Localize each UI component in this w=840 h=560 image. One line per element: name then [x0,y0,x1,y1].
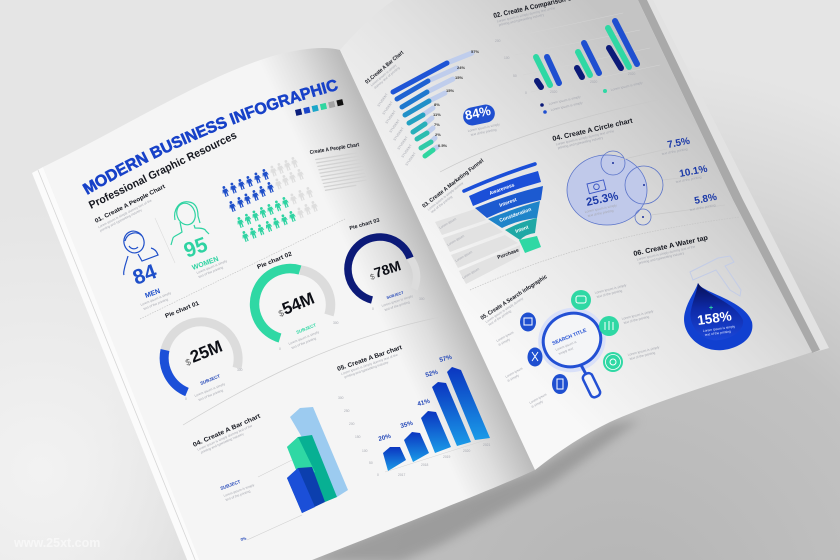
marketing funnel: Awareness [489,182,516,197]
stat: women [181,233,228,279]
marketing funnel: Lorem ipsum [454,250,473,263]
04 bar chart heading: 04. Create A Bar chart [192,412,262,449]
pie chart 03 [348,218,425,312]
search heading: Lorem ipsum is simply dummy [485,296,524,324]
05 column chart: 0 [377,473,379,477]
search icons: text of the printing [623,315,650,325]
05 column chart: 200 [349,422,355,426]
stat: men [130,260,172,311]
magnifier [529,298,615,399]
05 column chart: 250 [344,409,350,413]
horizontal bar chart: 8% [434,102,440,107]
05 column chart: 2018 [421,463,429,467]
search heading: 05. Create A Search infographic [480,274,549,322]
pie chart 01: 0 [185,397,187,401]
marketing funnel: Intent [515,224,530,235]
04 circle chart heading: 04. Create A Circle chart [552,118,634,143]
horizontal bar chart: STUDENT [401,144,413,159]
funnel heading: 03. Create A Marketing Funnel [422,158,485,210]
people pictogram chart [220,156,319,243]
05 column chart: 150 [355,435,361,439]
comparison bar chart: 100 [504,56,510,60]
pie chart 02: SUBJECT [296,322,317,335]
people chart text block [309,142,368,191]
people chart heading [94,184,170,233]
horizontal bar chart: 15% [446,88,454,93]
comparison bar chart: 2020 [550,90,558,94]
comparison legend: Lorem ipsum is simply [548,95,581,106]
comparison legend [540,81,643,114]
pie chart 02: $ [277,308,285,319]
horizontal bar chart: STUDENT [397,136,409,151]
water drop: + [709,305,713,312]
pie chart 03: 78M [372,257,403,281]
horizontal bar chart: STUDENT [382,101,394,116]
04 circle chart heading: printing and typesetting industry [557,136,604,150]
05 column chart: 2017 [398,473,406,477]
pie chart 02: Lorem ipsum is simply [288,330,320,346]
horizontal bar chart: STUDENT [377,93,389,108]
pie chart 03: text of the printing [384,300,410,312]
comparison legend: Lorem ipsum is simply [610,81,643,92]
horizontal bar chart: 57% [471,49,479,54]
05 bar chart heading: Lorem ipsum is simply dummy text of the [341,353,398,376]
marketing funnel: Interest [499,197,518,209]
people chart text block: Create A People Chart [309,142,360,156]
pie chart 01 [164,301,243,402]
comparison bar chart: 2020 [590,80,598,84]
pie chart 03: SUBJECT [386,290,405,300]
pie chart 02: 54M [279,289,317,319]
02 comparison heading [493,0,586,28]
callout 84%: text of the printing [470,128,497,137]
horizontal bar chart: 11% [433,112,441,117]
search icons: is simply [531,399,544,409]
search icons: is simply [498,337,511,347]
people chart heading: 01. Create A People Chart [94,184,166,225]
stat: men: MEN [144,288,161,300]
marketing funnel [435,164,543,284]
05 column chart: 2019 [443,455,451,459]
05 column chart: 41% [417,398,431,408]
funnel heading: Lorem ipsum is simply dummy [427,181,464,211]
people chart heading: Lorem ipsum is simply dummy text of the [97,198,153,229]
05 column chart: 100 [362,449,368,453]
horizontal bar chart: STUDENT [405,152,417,167]
01 bar chart heading: 01.Create A Bar Chart [364,50,405,86]
comparison bar chart: 0 [525,91,527,95]
stat: men: Lorem ipsum is simply [140,291,172,307]
horizontal bar chart: 24% [457,65,465,70]
comparison bar chart: 50 [513,74,517,78]
01 bar chart heading: Lorem ipsum is simply [370,63,398,87]
circle chart: text of the printing [689,203,716,212]
05 column chart: 35% [400,420,414,430]
stat: women: text of the printing [198,265,224,279]
06 water tap heading: printing and typesetting industry [638,251,685,265]
watermark: www.25xt.com [13,536,100,550]
subject note: text of the printing [225,489,251,502]
pie chart 01: Pie chart 01 [165,301,201,320]
pie chart 03: $ [369,272,376,282]
comparison bar chart: 200 [495,39,501,43]
search icons: text of the printing [596,289,623,299]
funnel heading: text of the printing [430,195,453,214]
icon: man [121,228,158,275]
horizontal bar chart: STUDENT [389,119,401,134]
comparison bar chart: 2020 [628,72,636,76]
05 bar chart heading: printing and typesetting industry [344,360,389,379]
pie chart 01: text of the printing [198,388,224,402]
pie chart 01: 25M [187,337,225,367]
stat: women: Lorem ipsum is simply [196,259,228,275]
search icons: Lorem ipsum is simply [594,283,627,295]
pie chart 03: Pie chart 03 [349,218,380,232]
05 column chart: 57% [439,354,453,364]
icon: money [587,180,606,194]
pie chart 02: 0 [279,347,281,351]
search icons: Lorem ipsum is simply [627,345,660,357]
circle chart: text of the printing [675,175,702,184]
pie chart 01: Lorem ipsum is simply [194,382,226,398]
people chart heading: printing and typesetting industry [99,208,143,233]
icon: water tap [690,256,741,296]
callout 84%: 84% [464,103,493,123]
main title: MODERN BUSINESS INFOGRAPHIC [82,80,338,195]
marketing funnel: Purchase [497,247,520,261]
callout 84% [461,103,500,137]
marketing funnel: Lorem ipsum [462,267,480,280]
pie chart 03: 0 [372,307,374,311]
subject note: Lorem ipsum is simply [223,483,255,498]
search icons: Lorem ipsum [505,366,524,379]
subject note [220,479,255,502]
water drop [684,283,752,350]
3d bar chart [247,407,348,540]
circle chart: 7.5% [666,136,691,151]
marketing funnel: Consideration [499,207,532,224]
left page [43,48,535,560]
pie chart 02: 300 [333,321,339,325]
stat: men: 84 [130,260,160,290]
water drop: Lorem ipsum is simply [703,324,736,333]
horizontal bar chart: STUDENT [393,127,405,142]
book shadow [300,420,640,560]
05 column chart: 300 [338,396,344,400]
magnifier: Lorem ipsum is [555,340,577,352]
subtitle: Professional Graphic Resources [87,129,239,212]
magnifier: SEARCH TITLE [552,327,588,347]
water drop: text of the printing [705,329,731,337]
stat: women: 95 [181,233,211,263]
search icons: text of the printing [629,351,656,361]
stat: men: text of the printing [143,297,169,311]
right page [340,0,812,470]
04 bar chart heading [192,412,266,456]
stat: women: WOMEN [191,256,220,272]
06 water tap heading [633,235,710,266]
pie chart 03: 300 [419,297,425,301]
pie chart 02: Pie chart 02 [257,251,294,271]
horizontal bar chart [377,49,479,167]
05 column chart: 2020 [463,449,471,453]
icon: woman [171,201,209,245]
colour swatches [295,99,344,116]
marketing funnel: Lorem ipsum [446,234,465,247]
horizontal bar chart: 2% [435,132,441,137]
pie chart 02 [255,251,339,351]
pie chart 01: SUBJECT [200,373,221,386]
horizontal bar chart: 15% [455,75,463,80]
05 column chart: 20% [378,433,392,443]
comparison bar chart [495,13,660,95]
02 comparison heading: printing and typesetting industry [498,13,545,27]
05 column chart [338,354,495,477]
horizontal bar chart: 7% [434,122,440,127]
marketing funnel: Lorem ipsum [438,217,457,230]
01 bar chart heading: dummy text of printing [373,66,401,90]
circle chart: Lorem ipsum is simply [584,203,617,214]
circle chart: 10.1% [678,164,709,180]
05 bar chart heading: 05. Create A Bar chart [336,344,404,373]
callout 84%: Lorem ipsum is simply [467,122,500,133]
comparison legend: Lorem ipsum is simply [550,101,583,112]
subject note: SUBJECT [220,479,241,491]
water drop: 158% [696,308,733,328]
zero percent label: 0% [240,536,247,542]
magnifier: simply text [558,346,574,356]
04 bar chart heading: printing and typesetting industry [200,432,245,455]
search icons: Lorem ipsum is simply [621,309,654,321]
horizontal bar chart: STUDENT [385,110,397,125]
pie chart 01: 300 [237,368,243,372]
circle chart: 5.8% [693,192,718,207]
pie chart 01: $ [184,357,192,368]
02 comparison heading: Lorem ipsum is simply dummy text of the [496,6,556,23]
circle chart: 25.3% [585,190,620,209]
horizontal bar chart: 0.5% [438,143,448,148]
05 column chart: 50 [369,461,373,465]
04 circle chart heading: Lorem ipsum is simply dummy text of the [555,129,615,146]
04 bar chart heading: Lorem ipsum is simply dummy text of the [197,424,253,452]
05 column chart: 2021 [483,443,491,447]
circle chart: text of the printing [587,209,614,218]
05 bar chart heading [336,344,406,380]
circle chart: text of the printing [661,147,688,156]
06 water tap heading: Lorem ipsum is simply dummy text of the [636,245,696,261]
05 column chart: 52% [425,369,439,379]
pie chart 02: text of the printing [291,336,317,350]
06 water tap heading: 06. Create A Water tap [633,235,709,258]
circle chart [567,136,725,225]
search icons: Lorem ipsum [529,392,548,405]
search icons [496,283,660,409]
search icons: Lorem ipsum [496,330,515,343]
search icons: is simply [507,373,520,383]
search heading: text of the printing [488,309,512,327]
pie chart 03: Lorem ipsum is simply [381,294,414,308]
